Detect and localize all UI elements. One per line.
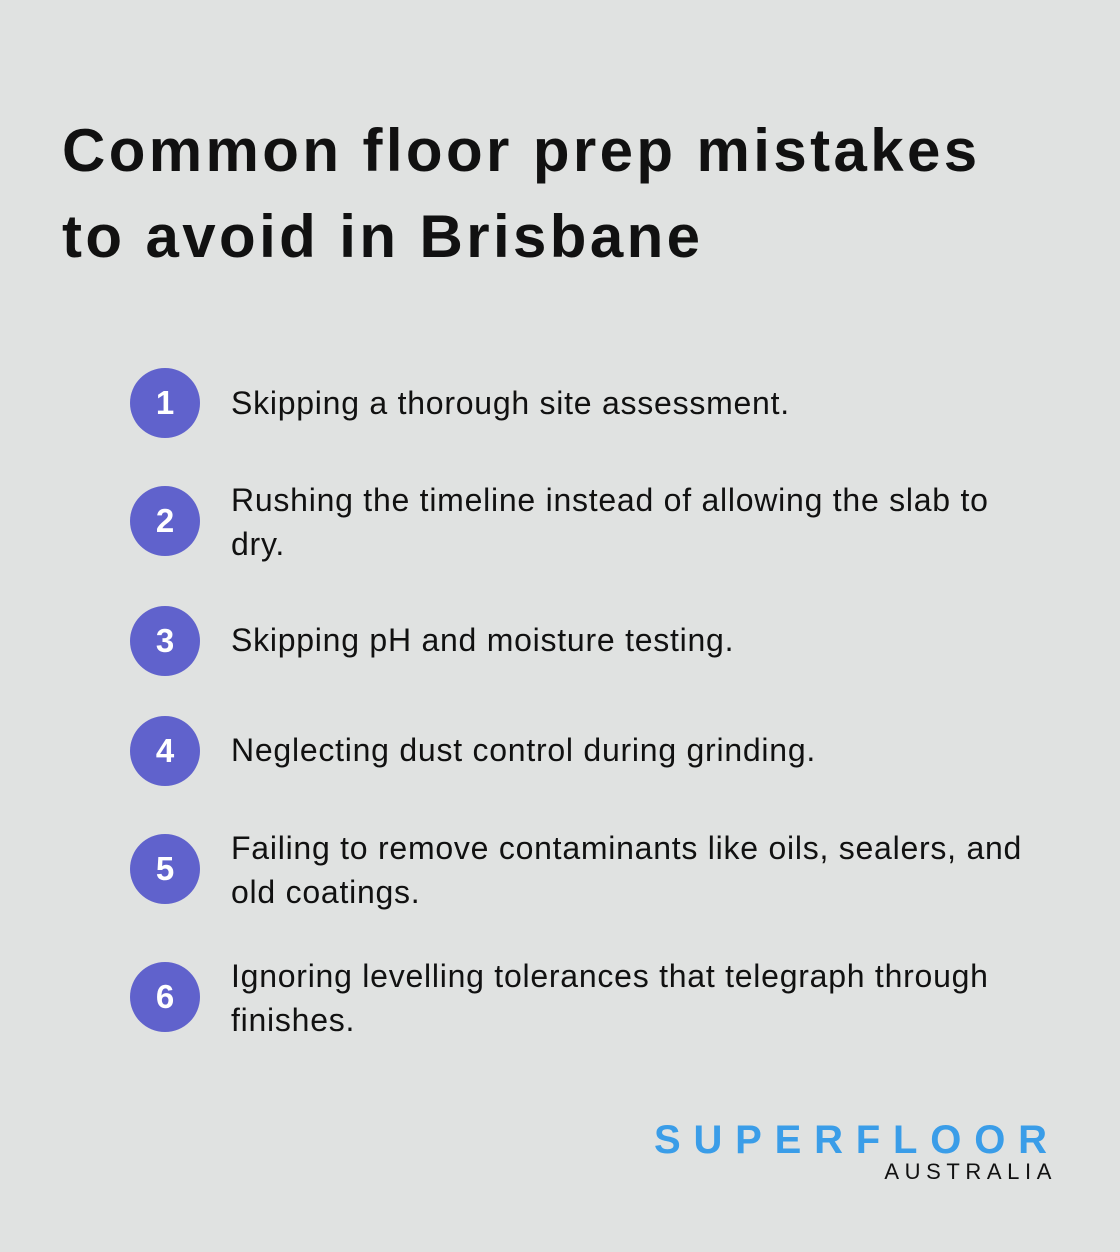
item 4: Neglecting dust control during grinding. bbox=[231, 732, 816, 768]
item 3 bbox=[130, 606, 734, 676]
item 6: 6 bbox=[156, 978, 174, 1015]
item 1 bbox=[130, 368, 790, 438]
item 4: 4 bbox=[156, 732, 174, 769]
item 2: dry. bbox=[231, 526, 285, 562]
item 6: finishes. bbox=[231, 1002, 355, 1038]
item 6: Ignoring levelling tolerances that telegraph through bbox=[231, 958, 989, 994]
item 2 bbox=[130, 482, 989, 562]
item 5: old coatings. bbox=[231, 874, 420, 910]
logo: SUPERFLOOR bbox=[654, 1118, 1060, 1162]
logo: AUSTRALIA bbox=[884, 1159, 1057, 1184]
item 5 bbox=[130, 830, 1022, 910]
title: to avoid in Brisbane bbox=[62, 203, 703, 270]
item 1: 1 bbox=[156, 384, 174, 421]
title bbox=[62, 117, 981, 270]
item 5: Failing to remove contaminants like oils, sealers, and bbox=[231, 830, 1022, 866]
item 1: Skipping a thorough site assessment. bbox=[231, 385, 790, 421]
item 3: 3 bbox=[156, 622, 174, 659]
item 6 bbox=[130, 958, 989, 1038]
title: Common floor prep mistakes bbox=[62, 117, 981, 184]
item 2: 2 bbox=[156, 502, 174, 539]
item 4 bbox=[130, 716, 816, 786]
item 5: 5 bbox=[156, 850, 174, 887]
item 3: Skipping pH and moisture testing. bbox=[231, 622, 734, 658]
item 2: Rushing the timeline instead of allowing the slab to bbox=[231, 482, 989, 518]
logo bbox=[654, 1118, 1060, 1184]
